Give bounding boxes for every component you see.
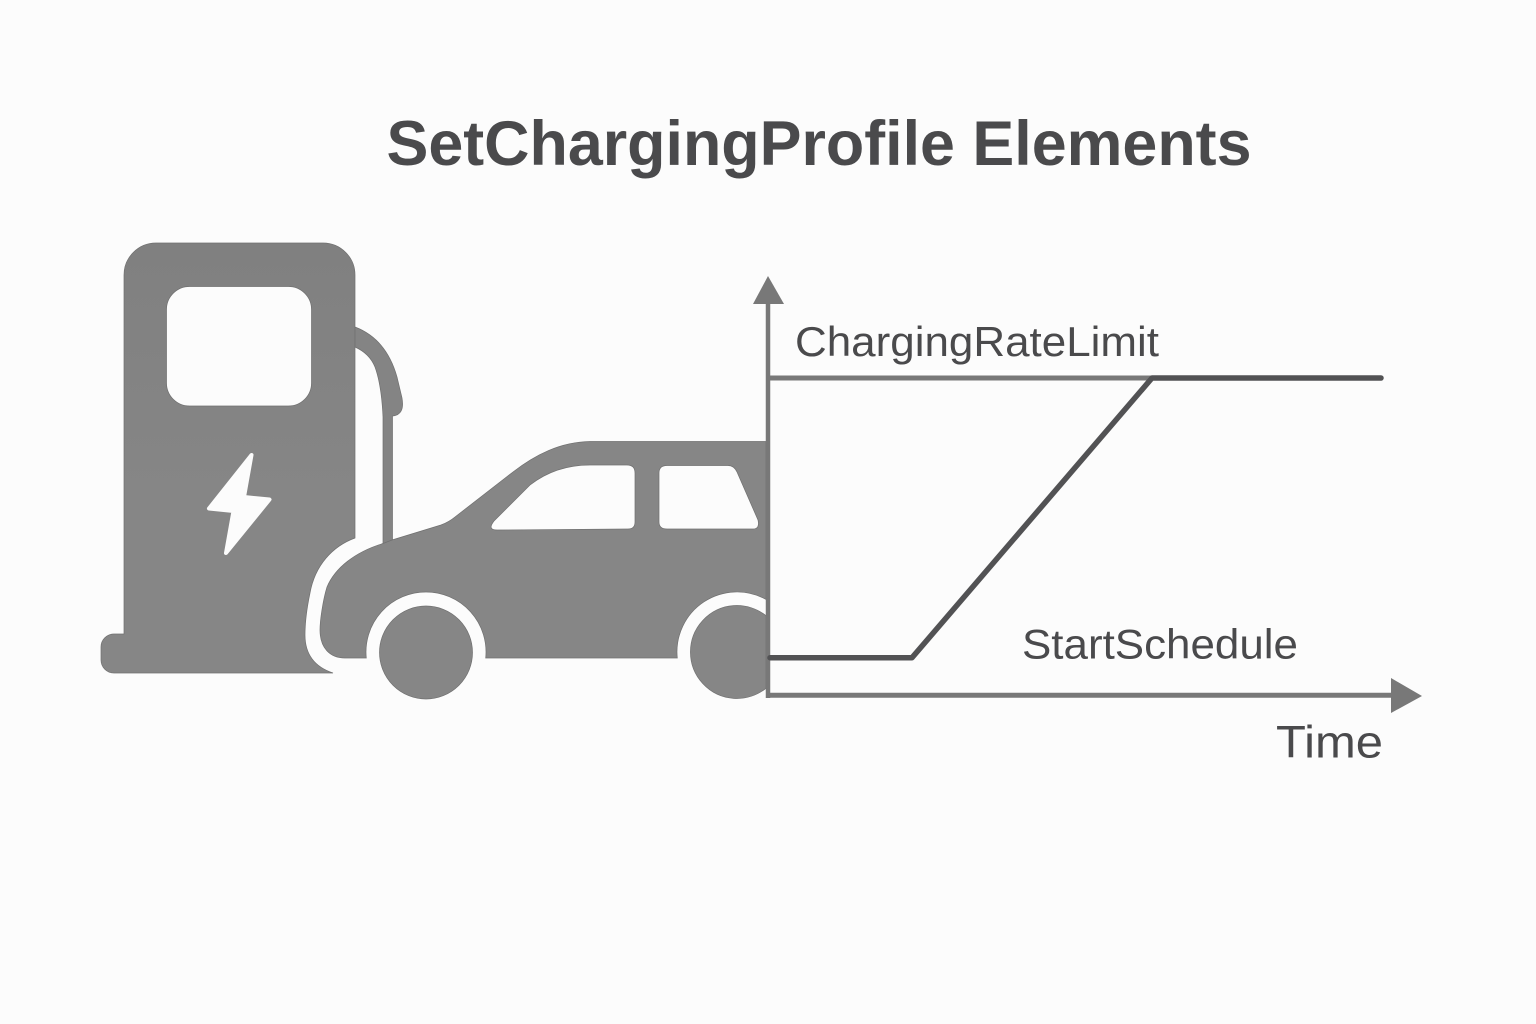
charging schedule line — [770, 378, 1381, 658]
icon: charging station — [101, 243, 403, 673]
label: Time: Time — [1276, 716, 1383, 768]
rear wheel — [690, 606, 766, 698]
icon: car — [320, 442, 766, 699]
label: ChargingRateLimit: ChargingRateLimit — [795, 318, 1159, 365]
title: SetChargingProfile Elements — [386, 109, 1252, 179]
label: StartSchedule: StartSchedule — [1022, 620, 1298, 668]
chart: charging rate over time — [753, 276, 1422, 768]
front wheel — [380, 606, 472, 699]
y axis arrow — [753, 276, 784, 698]
x axis arrow — [766, 678, 1422, 713]
charging rate limit line — [768, 376, 1152, 380]
